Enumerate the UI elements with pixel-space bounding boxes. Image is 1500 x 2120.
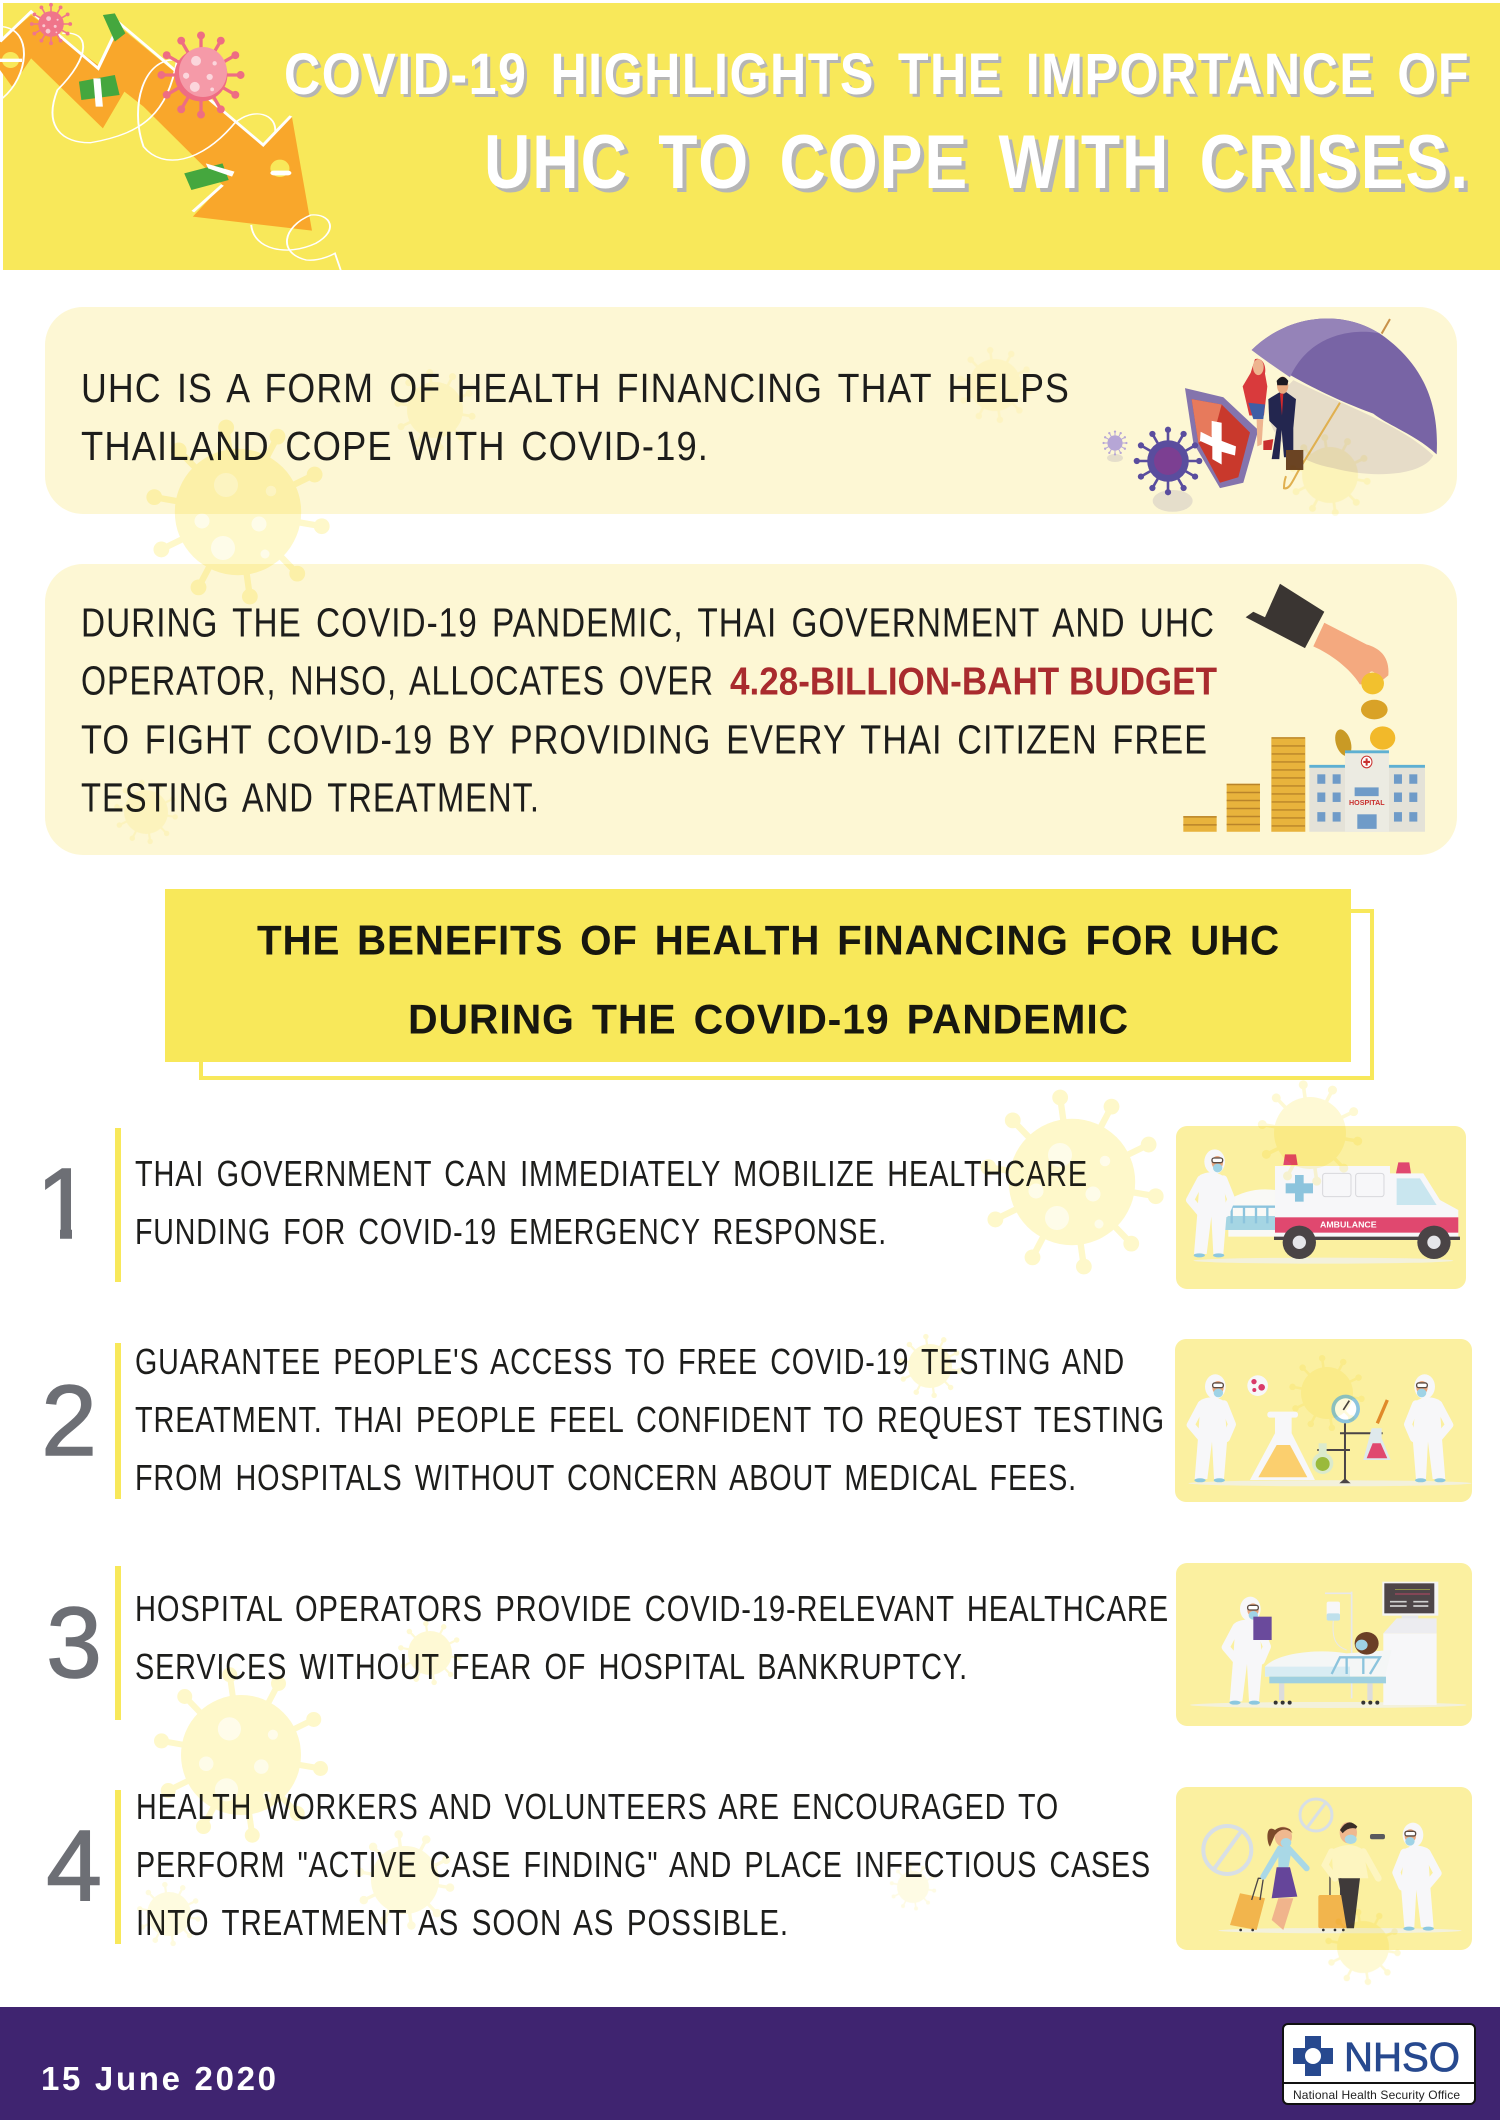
text block: TO FIGHT COVID-19 BY PROVIDING EVERY THAI CITIZEN FREE	[81, 716, 1208, 762]
section heading banner	[165, 889, 1372, 1078]
text block	[81, 600, 1217, 820]
benefit 3: 3	[46, 1587, 102, 1699]
text block	[81, 365, 1070, 469]
benefit 3 text: SERVICES WITHOUT FEAR OF HOSPITAL BANKRUPTCY.	[135, 1646, 968, 1687]
date: 15 June 2020	[41, 2060, 276, 2097]
icon: falling arrow with money and viruses	[0, 3, 341, 270]
benefit 4 text	[136, 1786, 1151, 1943]
illustration: ambulance: AMBULANCE	[1320, 1219, 1377, 1229]
benefit 4 text: HEALTH WORKERS AND VOLUNTEERS ARE ENCOURAGED TO	[136, 1786, 1059, 1827]
benefit 4: 4	[46, 1810, 102, 1922]
benefit 4 text: INTO TREATMENT AS SOON AS POSSIBLE.	[136, 1902, 789, 1943]
benefit 1 text	[135, 1153, 1088, 1252]
icon: hand dropping coins onto hospital: HOSPITAL	[1349, 800, 1385, 807]
footer bar	[0, 2007, 1500, 2120]
benefit 1: 1	[36, 1148, 92, 1260]
benefit 2 text: GUARANTEE PEOPLE'S ACCESS TO FREE COVID-19 TESTING AND	[135, 1341, 1125, 1382]
text block: UHC IS A FORM OF HEALTH FINANCING THAT HELPS	[81, 365, 1070, 411]
heading: THE BENEFITS OF HEALTH FINANCING FOR UHC	[257, 916, 1280, 964]
title	[284, 42, 1470, 205]
illustration: ambulance	[1176, 1126, 1466, 1289]
text block: DURING THE COVID-19 PANDEMIC, THAI GOVERNMENT AND UHC	[81, 600, 1215, 646]
heading: DURING THE COVID-19 PANDEMIC	[408, 996, 1129, 1042]
NHSO logo: NHSO	[1344, 2034, 1460, 2080]
text block: 4.28-BILLION-BAHT BUDGET	[730, 660, 1217, 704]
NHSO logo	[1283, 2024, 1475, 2104]
heading	[257, 916, 1280, 1042]
text block: TESTING AND TREATMENT.	[81, 774, 540, 820]
benefit 3 text: HOSPITAL OPERATORS PROVIDE COVID-19-RELEVANT HEALTHCARE	[135, 1588, 1169, 1629]
benefit 4 text: PERFORM "ACTIVE CASE FINDING" AND PLACE INFECTIOUS CASES	[136, 1844, 1151, 1885]
benefit 2 text: FROM HOSPITALS WITHOUT CONCERN ABOUT MEDICAL FEES.	[135, 1457, 1077, 1498]
benefit 4	[46, 1786, 1151, 1944]
benefit 1	[36, 1128, 1088, 1282]
illustration: laboratory	[1175, 1339, 1472, 1502]
text block: THAILAND COPE WITH COVID-19.	[81, 423, 709, 469]
header banner	[0, 3, 1500, 270]
panel: budget	[45, 564, 1457, 855]
benefit 1 text: THAI GOVERNMENT CAN IMMEDIATELY MOBILIZE HEALTHCARE	[135, 1153, 1088, 1194]
icon: umbrella, shield, people and virus	[1102, 318, 1437, 512]
illustration: patient in hospital bed	[1176, 1563, 1472, 1726]
benefit 1 text: FUNDING FOR COVID-19 EMERGENCY RESPONSE.	[135, 1211, 887, 1252]
panel: what UHC is	[45, 307, 1457, 514]
text block: OPERATOR, NHSO, ALLOCATES OVER	[81, 658, 714, 704]
NHSO logo: National Health Security Office	[1293, 2088, 1460, 2102]
background virus watermarks	[114, 347, 1401, 1985]
illustration: travellers temperature screening	[1176, 1787, 1472, 1950]
benefit 2	[41, 1341, 1165, 1499]
benefit 3 text	[135, 1588, 1169, 1687]
benefit 2: 2	[41, 1365, 97, 1477]
icon: hand dropping coins onto hospital	[1183, 584, 1425, 832]
benefit 3	[46, 1566, 1169, 1720]
benefit 2 text	[135, 1341, 1165, 1498]
benefit 2 text: TREATMENT. THAI PEOPLE FEEL CONFIDENT TO REQUEST TESTING	[135, 1399, 1165, 1440]
